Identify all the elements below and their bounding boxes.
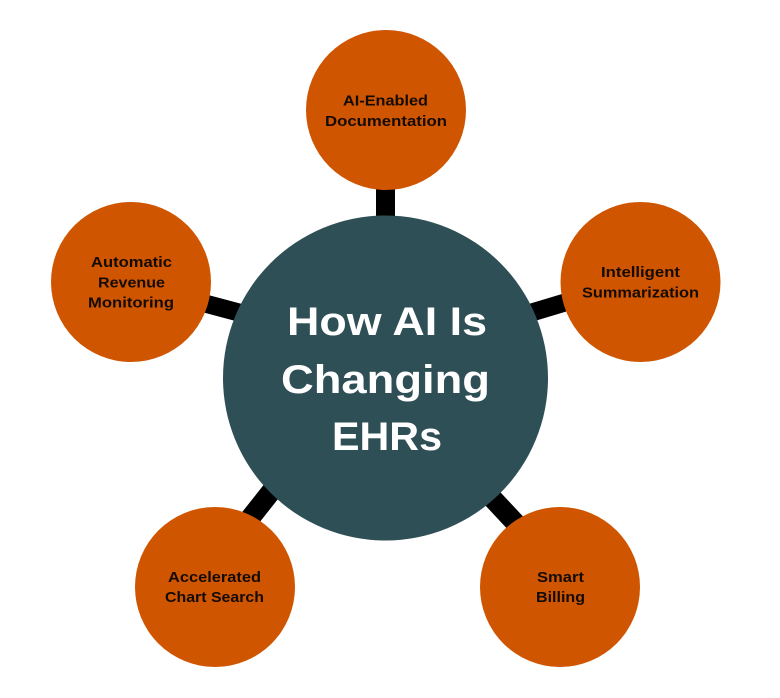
hub title: Changing: [281, 358, 490, 402]
connector: top: [376, 170, 395, 240]
node: AI-Enabled Documentation: AI-Enabled: [343, 94, 428, 110]
node: AI-Enabled Documentation: Documentation: [325, 114, 447, 130]
hub title: [281, 300, 490, 459]
node: Smart Billing: Billing: [536, 590, 585, 606]
node: Smart Billing: Smart: [537, 570, 584, 586]
node: Automatic Revenue Monitoring: Monitoring: [88, 296, 174, 312]
connector: right: [520, 298, 580, 316]
hub title: How AI Is: [287, 300, 487, 344]
node: Automatic Revenue Monitoring: [51, 202, 211, 362]
connector: bottom left: [232, 469, 289, 541]
node: Automatic Revenue Monitoring: Automatic: [91, 255, 172, 271]
central hub: [223, 216, 548, 540]
connector: left: [190, 300, 250, 316]
node: Intelligent Summarization: Summarization: [582, 286, 699, 302]
node: AI-Enabled Documentation: [306, 30, 466, 190]
node: Accelerated Chart Search: Accelerated: [168, 570, 261, 586]
node: Intelligent Summarization: [560, 202, 720, 362]
node: Accelerated Chart Search: [135, 507, 295, 667]
connector: bottom right: [472, 477, 536, 544]
hub title: EHRs: [332, 415, 442, 459]
node: Smart Billing: [480, 507, 640, 667]
node: Accelerated Chart Search: Chart Search: [165, 590, 264, 606]
node: Intelligent Summarization: Intelligent: [601, 265, 680, 281]
node: Automatic Revenue Monitoring: Revenue: [98, 276, 165, 292]
